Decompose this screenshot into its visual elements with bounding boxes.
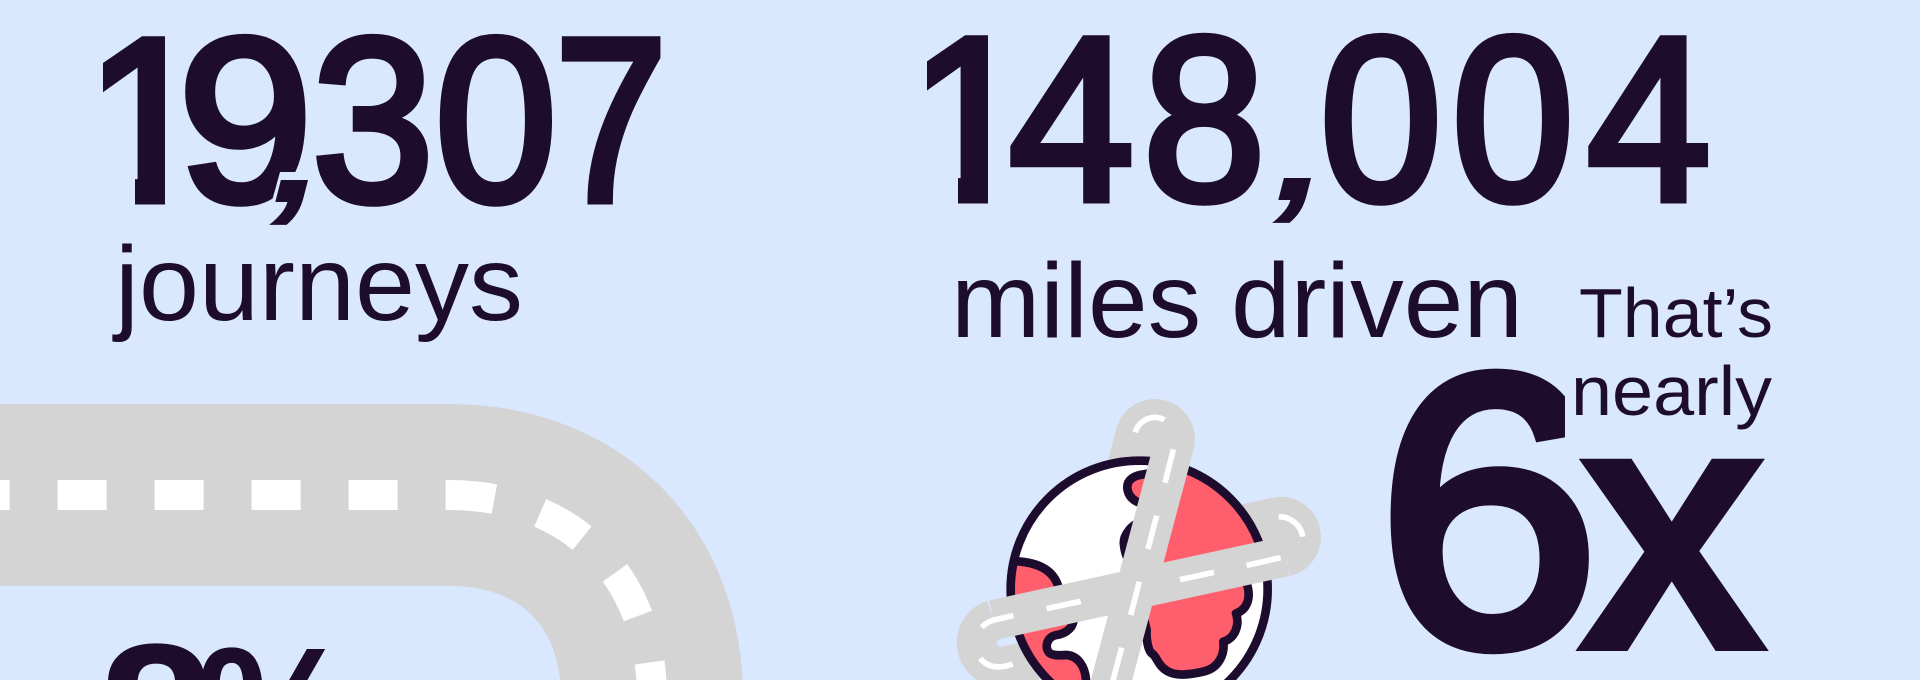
- stat: 6x: [1390, 368, 1769, 654]
- text: nearly: nearly: [1571, 352, 1772, 430]
- stat: bottom-left percentage, cropped by page edge: [98, 600, 355, 680]
- road segments behind globe: [977, 419, 1301, 667]
- road: curved main road: [0, 495, 652, 680]
- text: That's: That’s: [1579, 274, 1773, 352]
- stat: 19,307: ,: [269, 69, 324, 234]
- label: journeys: journeys: [112, 225, 523, 343]
- icon: globe wrapped in crossing roads: [977, 417, 1303, 680]
- globe: [1006, 456, 1272, 680]
- label: miles driven: miles driven: [951, 242, 1523, 360]
- stat: 148,004: ,: [1272, 67, 1327, 232]
- stat: 19,307: [103, 34, 660, 225]
- road segments in front of globe: [980, 417, 1303, 680]
- stat: 148,004: [927, 32, 1708, 223]
